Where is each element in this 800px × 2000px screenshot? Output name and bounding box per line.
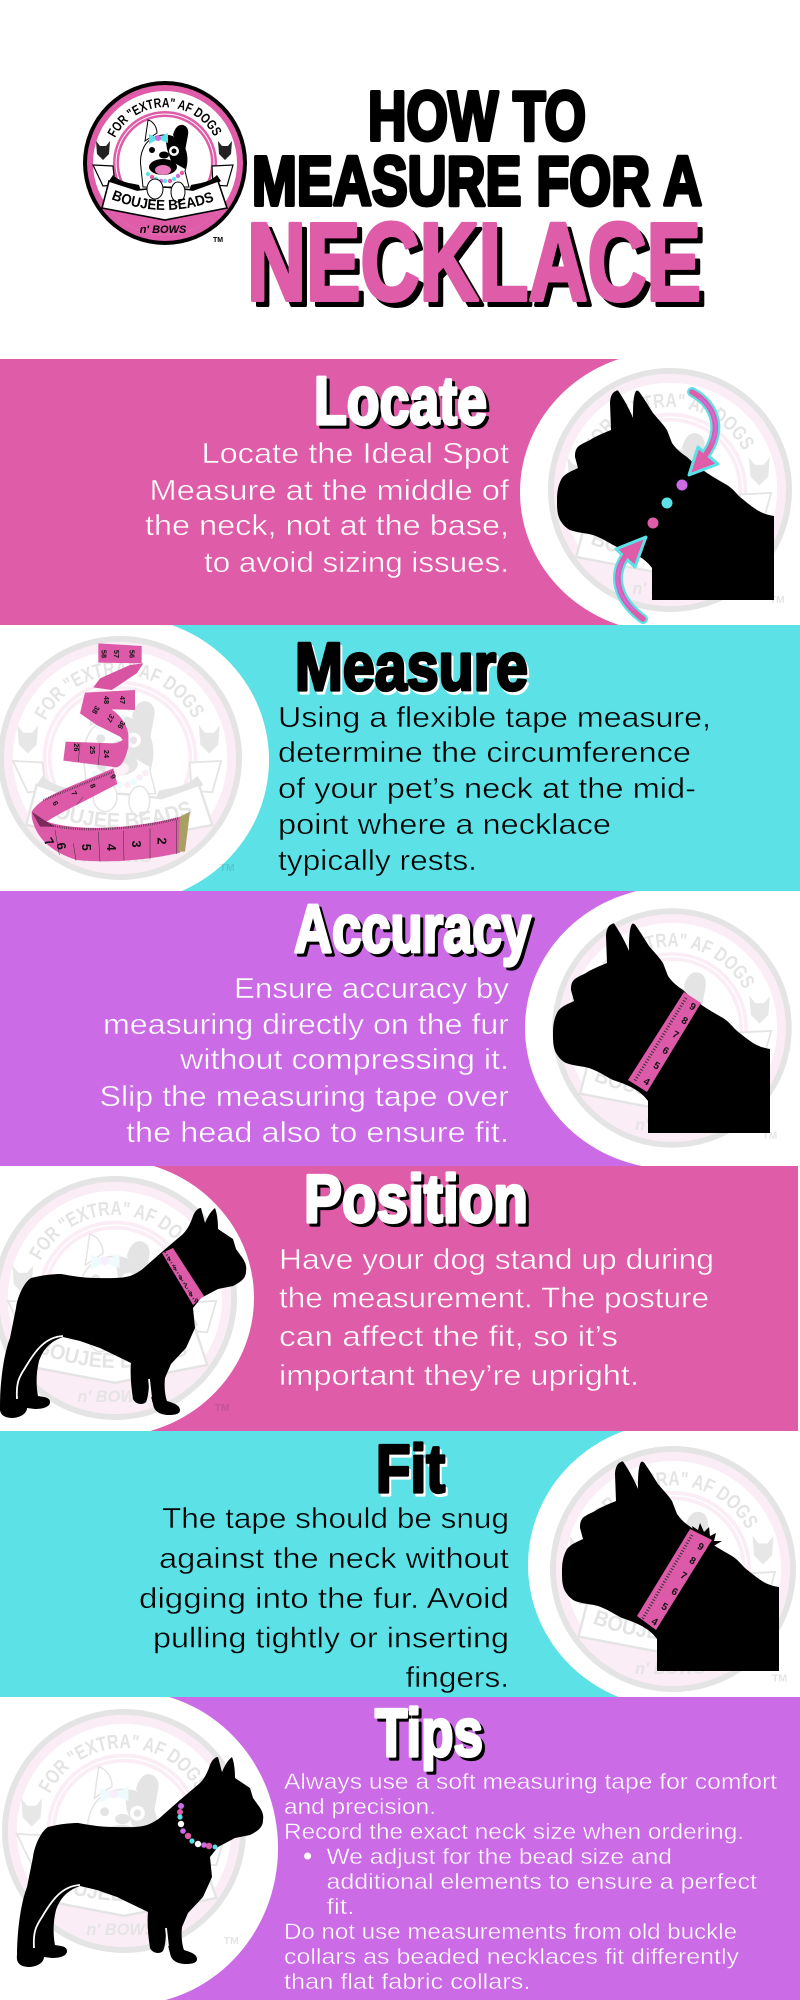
watermark logo: n' BOWS: [82, 848, 152, 866]
fur tufts: [692, 1523, 722, 1547]
measuring tape collar: 5: [659, 1601, 670, 1614]
body text: [100, 973, 510, 1149]
body text: the measurement. The posture: [279, 1282, 709, 1314]
body text: against the neck without: [159, 1543, 509, 1575]
measuring tape collar: [637, 1529, 712, 1630]
icon: tape measure: 3: [129, 840, 143, 848]
body text: of your pet’s neck at the mid-: [278, 773, 696, 805]
body text: collars as beaded necklaces fit differently: [284, 1944, 740, 1969]
trademark: TM: [213, 237, 223, 244]
body text: [278, 702, 711, 877]
measuring tape collar: 8: [679, 1015, 690, 1028]
watermark logo: TM: [224, 1936, 239, 1947]
measuring tape collar: [628, 992, 701, 1092]
body text: determine the circumference: [278, 737, 691, 769]
body text: typically rests.: [278, 845, 477, 877]
watermark logo: TM: [770, 595, 785, 606]
watermark logo: TM: [763, 1131, 777, 1142]
icon: tape measure: 25: [88, 746, 97, 754]
dog head silhouette: [553, 923, 770, 1133]
panel: position: [0, 1161, 798, 1431]
icon: tape measure: 6: [51, 800, 60, 807]
body text: Slip the measuring tape over: [100, 1081, 510, 1113]
watermark logo: n' BOWS: [86, 1921, 156, 1939]
watermark logo: [550, 1446, 796, 1692]
panel: measure: [0, 625, 800, 891]
body text: the neck, not at the base,: [145, 510, 509, 542]
body text: fingers.: [406, 1662, 509, 1694]
measuring tape collar: 6: [179, 1276, 183, 1282]
measuring tape collar: 5: [651, 1060, 662, 1073]
beaded necklace: [177, 1803, 218, 1850]
body text: The tape should be snug: [162, 1503, 509, 1535]
body text: [279, 1244, 714, 1392]
measuring tape collar: 7: [678, 1570, 689, 1583]
heading: Locate: [314, 363, 487, 439]
icon: tape measure: 5: [79, 844, 93, 851]
body text: [145, 438, 509, 579]
bead dots: [648, 480, 688, 528]
measuring tape collar: [162, 1248, 204, 1305]
panel: accuracy: [0, 891, 792, 1166]
body text: Do not use measurements from old buckle: [284, 1919, 737, 1944]
panel: fit: [0, 1431, 796, 1697]
measuring tape collar: 4: [167, 1257, 171, 1263]
measuring tape collar: 5: [173, 1266, 177, 1272]
body text: digging into the fur. Avoid: [139, 1583, 509, 1615]
watermark logo: FOR "EXTRA" AF DOGS: [38, 1734, 204, 1793]
watermark logo: FOR "EXTRA" AF DOGS: [586, 393, 754, 450]
measuring tape collar: 6: [669, 1586, 680, 1599]
body text: [139, 1503, 509, 1694]
panel: tips: [2, 1695, 800, 2000]
logo arc text: FOR "EXTRA" AF DOGS: [107, 98, 222, 138]
watermark logo: FOR "EXTRA" AF DOGS: [29, 1201, 182, 1260]
watermark logo: FOR "EXTRA" AF DOGS: [602, 933, 754, 988]
measuring tape collar: 7: [670, 1029, 681, 1042]
icon: tape measure: 36: [116, 719, 127, 731]
body text: to avoid sizing issues.: [204, 547, 509, 579]
body text: We adjust for the bead size and: [326, 1844, 672, 1869]
watermark logo: [548, 368, 792, 612]
body text: [284, 1769, 778, 1994]
body text: Have your dog stand up during: [279, 1244, 714, 1276]
watermark logo: FOR "EXTRA" AF DOGS: [594, 1472, 758, 1528]
heading: Accuracy: [294, 891, 531, 967]
watermark logo: n' BOWS: [632, 580, 702, 598]
dog head silhouette: [557, 390, 774, 600]
icon: tape measure: 37: [105, 712, 116, 724]
arrow: top: [689, 392, 718, 475]
arrow: bottom: [616, 537, 646, 619]
body text: pulling tightly or inserting: [153, 1622, 509, 1654]
measuring tape collar: 4: [649, 1616, 660, 1629]
heading: Position: [304, 1161, 528, 1237]
body text: Record the exact neck size when ordering.: [284, 1819, 744, 1844]
body text: can affect the fit, so it’s: [279, 1321, 618, 1353]
watermark logo: TM: [772, 1672, 787, 1684]
watermark logo: [2, 1709, 246, 1953]
icon: tape measure: 38: [90, 704, 102, 716]
measuring tape collar: 4: [641, 1076, 652, 1089]
logo banner text: BOUJEE BEADS: [112, 190, 214, 210]
dog silhouette: [0, 1208, 246, 1418]
measuring tape collar: 9: [687, 1001, 698, 1014]
body text: important they’re upright.: [279, 1360, 639, 1392]
icon: tape measure: 57: [112, 650, 121, 658]
measuring tape collar: 6: [660, 1045, 671, 1058]
body text: Locate the Ideal Spot: [202, 438, 509, 470]
body text: Using a flexible tape measure,: [278, 702, 711, 734]
icon: tape measure: 24: [102, 750, 111, 759]
body text: Always use a soft measuring tape for comfort: [284, 1769, 778, 1794]
watermark logo: TM: [220, 863, 235, 874]
watermark logo: [0, 636, 242, 880]
body text: measuring directly on the fur: [103, 1009, 510, 1041]
watermark logo: [0, 1176, 237, 1420]
icon: tape measure: 7: [41, 835, 57, 849]
body text: Measure at the middle of: [150, 475, 509, 507]
watermark logo: BOUJEE BEADS: [42, 1344, 186, 1368]
icon: tape measure: 56: [127, 650, 136, 658]
watermark logo: n' BOWS: [635, 1116, 703, 1134]
body text: point where a necklace: [278, 809, 611, 841]
body text: additional elements to ensure a perfect: [326, 1869, 758, 1894]
measuring tape collar: 8: [189, 1292, 193, 1298]
title: [247, 77, 702, 324]
logo: [83, 81, 247, 245]
title line 1: HOW TO: [368, 77, 586, 155]
watermark logo: BOUJEE BEADS: [594, 1610, 657, 1639]
heading: Measure: [295, 629, 528, 705]
watermark logo: BOUJEE BEADS: [68, 1887, 123, 1901]
watermark logo: [552, 908, 792, 1148]
watermark logo: BOUJEE BEADS: [594, 1072, 642, 1094]
watermark logo: n' BOWS: [635, 1660, 705, 1678]
icon: tape measure: 58: [100, 650, 109, 658]
watermark logo: BOUJEE BEADS: [56, 802, 192, 828]
icon: tape measure: 48: [102, 696, 111, 704]
body text: and precision.: [284, 1794, 436, 1819]
watermark logo: FOR "EXTRA" AF DOGS: [34, 662, 204, 720]
measuring tape collar: 7: [184, 1284, 188, 1290]
icon: tape measure: 9: [108, 773, 118, 780]
icon: tape measure: 8: [88, 782, 98, 790]
logo sub text: n' BOWS: [140, 224, 187, 236]
heading: Fit: [376, 1431, 445, 1507]
watermark logo: BOUJEE BEADS: [591, 536, 616, 552]
icon: tape measure: [32, 643, 190, 862]
icon: tape measure: 4: [104, 844, 118, 851]
measuring tape collar: 9: [195, 1299, 199, 1305]
icon: tape measure: 7: [69, 790, 79, 797]
icon: tape measure: 26: [72, 743, 81, 751]
panel: locate: [0, 359, 792, 625]
body text: without compressing it.: [179, 1044, 509, 1076]
body text: than flat fabric collars.: [284, 1969, 530, 1994]
body text: Ensure accuracy by: [234, 973, 510, 1005]
measuring tape collar: 8: [687, 1555, 698, 1568]
watermark logo: TM: [215, 1403, 230, 1414]
body text: the head also to ensure fit.: [126, 1117, 509, 1149]
icon: tape measure: 2: [155, 837, 169, 845]
watermark logo: n' BOWS: [77, 1388, 147, 1406]
body text: fit.: [326, 1894, 354, 1919]
icon: tape measure: 6: [54, 841, 69, 851]
measuring tape collar: 9: [695, 1541, 706, 1554]
heading: Tips: [375, 1695, 483, 1771]
dog silhouette: [17, 1757, 263, 1967]
icon: tape measure: 47: [118, 696, 127, 704]
dog head silhouette: [562, 1461, 779, 1671]
